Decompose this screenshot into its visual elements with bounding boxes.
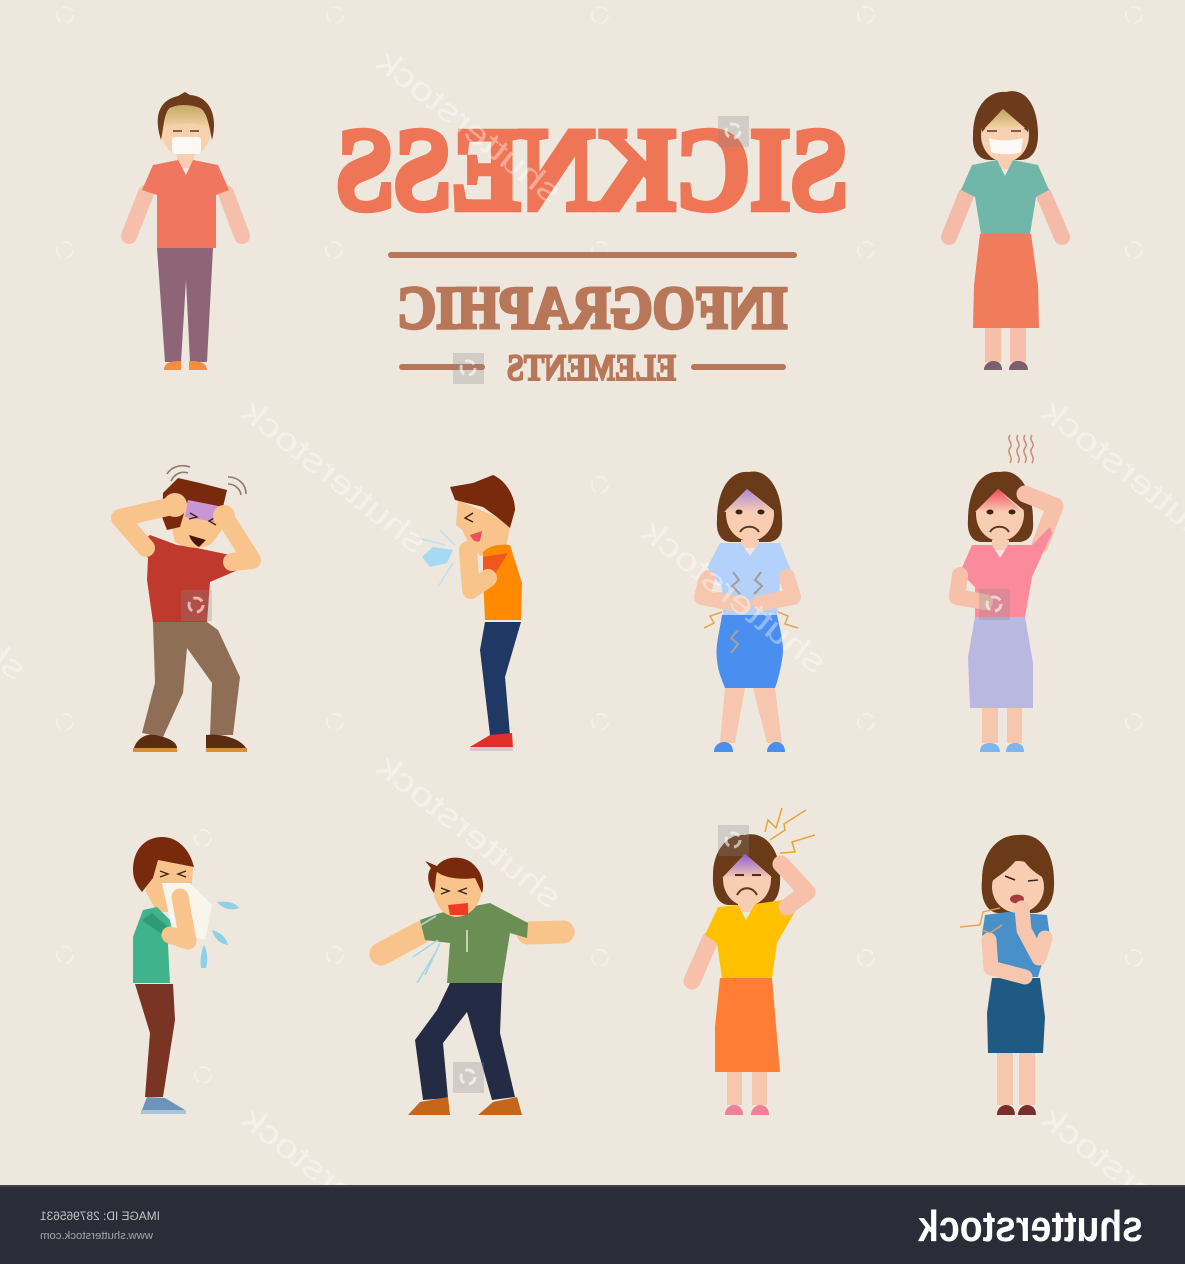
logo: shutterstock	[918, 1202, 1143, 1251]
shoes	[134, 735, 246, 748]
trousers	[142, 622, 240, 737]
hair	[158, 92, 214, 140]
hands	[163, 493, 187, 517]
shirt	[483, 545, 522, 620]
faint watermark marks	[57, 7, 1142, 1083]
watermark text: shutterstock	[635, 512, 834, 680]
cough spray	[422, 547, 453, 567]
legs	[720, 688, 782, 743]
legs	[997, 1053, 1035, 1105]
hair	[425, 858, 483, 893]
shirt	[137, 535, 245, 622]
title: SICKNESS: SICKNESS	[336, 104, 848, 235]
mouth	[1010, 894, 1024, 904]
face	[976, 487, 1024, 541]
shirt	[142, 160, 229, 248]
head	[145, 860, 193, 912]
footer bar	[0, 1185, 1185, 1264]
figure: man coughing into hand	[418, 475, 522, 751]
face mask	[989, 138, 1023, 154]
face	[726, 487, 774, 541]
legs	[727, 1072, 767, 1105]
tissue	[162, 883, 212, 940]
trousers	[157, 248, 213, 362]
arms	[989, 908, 1045, 977]
mouth	[448, 903, 468, 915]
shirt	[133, 907, 173, 983]
face	[992, 861, 1044, 913]
dizzy lines	[167, 466, 246, 495]
face mask	[172, 137, 201, 154]
throat pain zigzags	[960, 908, 1002, 933]
legs	[982, 708, 1022, 743]
subtitle: ELEMENTS: ELEMENTS	[507, 348, 676, 389]
zigzags	[765, 808, 815, 853]
skirt	[987, 978, 1045, 1053]
steam lines	[1009, 435, 1033, 463]
hair back	[717, 472, 782, 542]
skirt	[973, 234, 1039, 328]
watermark text: shutterstock	[370, 42, 569, 210]
hair	[133, 837, 194, 892]
hair back	[968, 472, 1033, 542]
figure: man coughing forward	[381, 858, 563, 1115]
figure: woman with migraine	[692, 808, 815, 1115]
shoes	[408, 1097, 522, 1115]
image id: IMAGE ID: 287965631	[40, 1209, 160, 1223]
arms	[702, 577, 793, 605]
head	[170, 498, 224, 548]
arms	[381, 932, 563, 954]
watermark logo tiles	[181, 116, 1010, 1093]
watermark text: shutterstock	[235, 392, 434, 560]
shirt	[982, 912, 1050, 977]
shirt	[705, 900, 797, 978]
subtitle: INFOGRAPHIC: INFOGRAPHIC	[397, 275, 788, 341]
pain zigzags	[732, 572, 762, 594]
heading rule	[388, 252, 797, 258]
lower arm	[957, 575, 985, 602]
face	[723, 852, 771, 906]
watermark text: shutterstock	[370, 747, 569, 915]
raised arm	[781, 864, 807, 907]
subtitle: ELEMENTS	[399, 348, 786, 389]
shirt	[707, 543, 792, 615]
lower arm	[692, 940, 710, 981]
figure: man sneezing into tissue	[133, 837, 239, 1114]
shoe	[142, 1097, 185, 1110]
forehead pain	[185, 500, 222, 522]
sneeze drops	[201, 902, 239, 968]
figure: woman with sore throat	[960, 835, 1054, 1115]
figure: woman with stomach ache	[702, 472, 798, 752]
skirt	[717, 615, 783, 688]
figure: man wearing mask	[129, 92, 242, 370]
hair	[450, 475, 515, 528]
website: www.shutterstock.com	[40, 1230, 154, 1242]
arm	[468, 550, 488, 590]
skirt	[968, 617, 1033, 708]
shoes	[714, 742, 785, 752]
shirt	[960, 527, 1052, 617]
trousers	[135, 984, 175, 1097]
raised arm	[1025, 494, 1055, 545]
hair back	[713, 834, 780, 905]
head	[432, 870, 482, 917]
shirt	[961, 160, 1049, 234]
shoe	[470, 733, 513, 748]
hair back	[982, 835, 1054, 913]
figure: woman wearing mask	[949, 91, 1062, 370]
figure: man with headache	[120, 466, 252, 752]
shoes	[164, 361, 207, 370]
arms	[120, 506, 252, 562]
head	[456, 500, 510, 556]
trousers	[480, 622, 521, 735]
hair back	[973, 91, 1038, 160]
cough spray	[413, 940, 440, 983]
watermark text: shutterstock	[235, 1099, 434, 1264]
arm	[170, 897, 188, 941]
mouth	[470, 531, 482, 542]
shirt	[420, 903, 528, 983]
figure: woman with fever	[957, 435, 1055, 752]
skirt	[715, 978, 780, 1072]
trousers	[415, 983, 515, 1100]
hair	[162, 478, 227, 530]
